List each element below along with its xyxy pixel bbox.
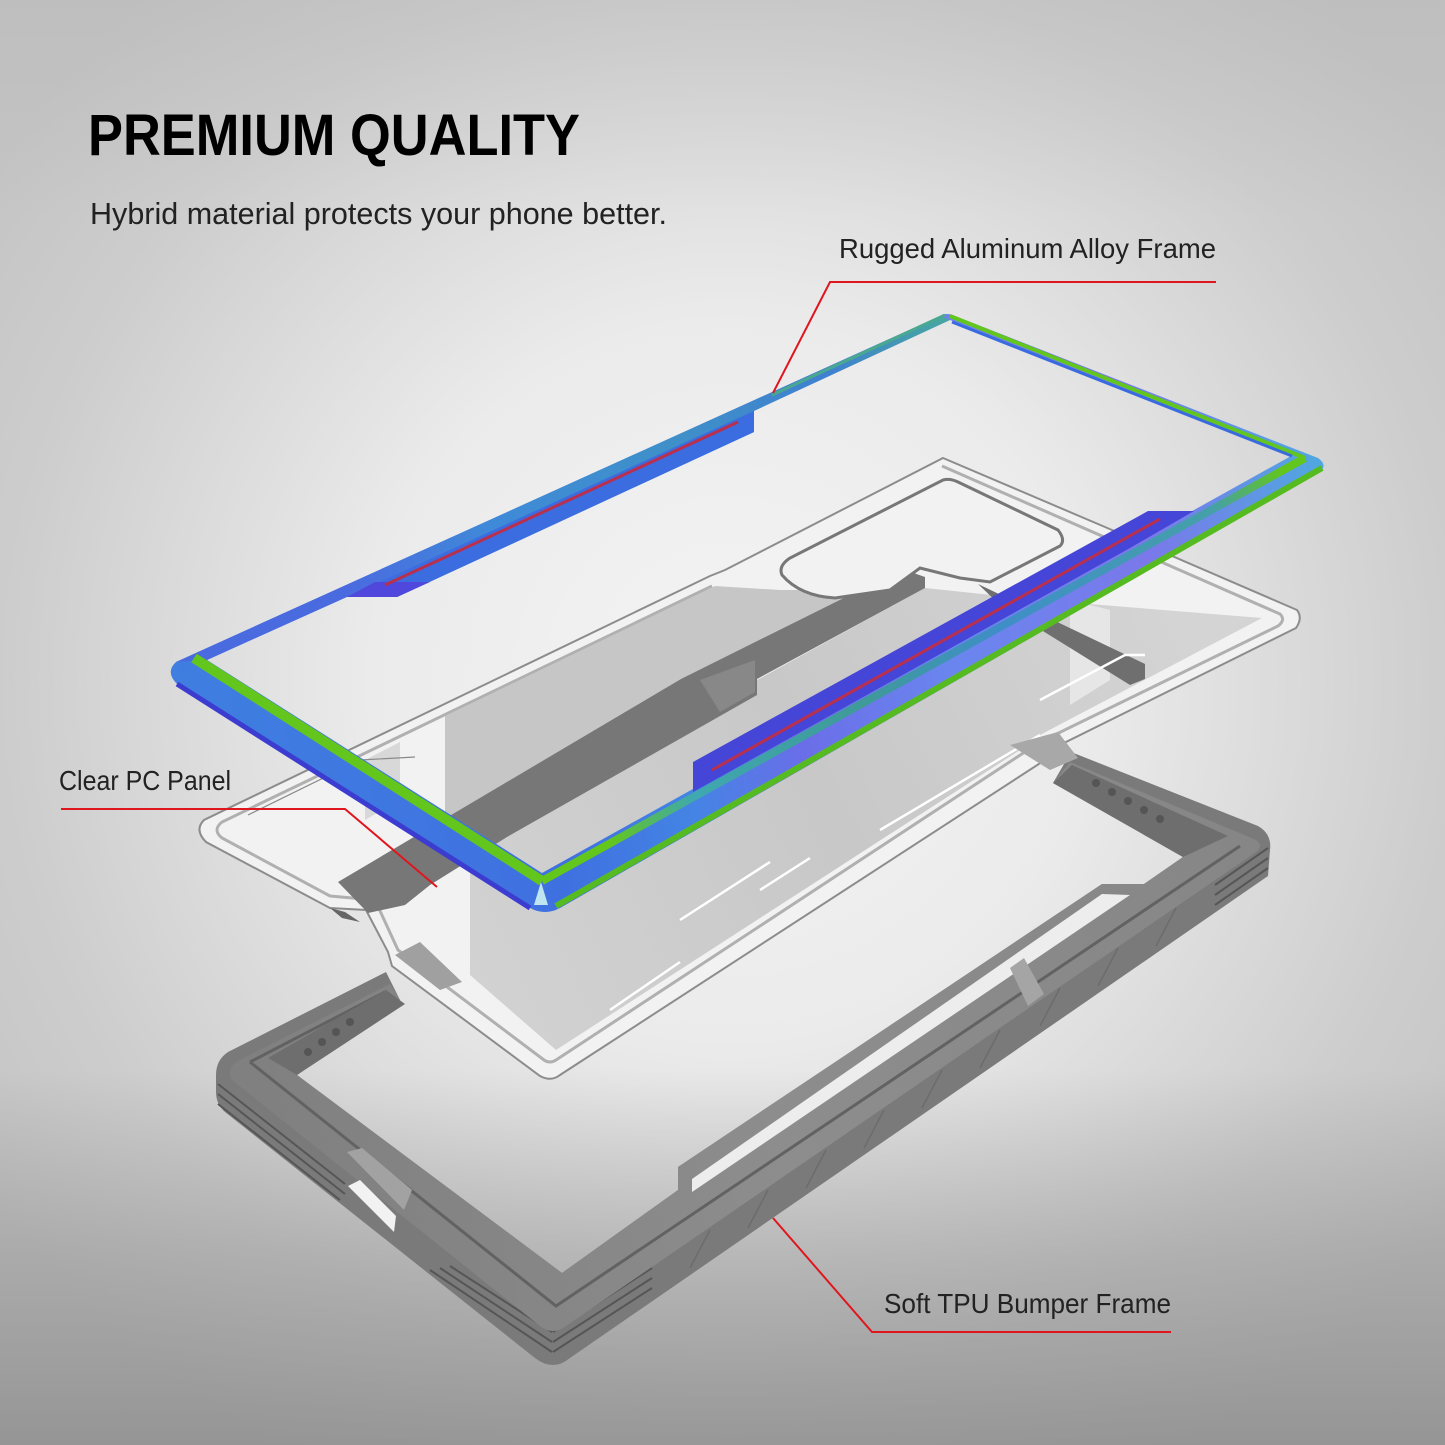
title: PREMIUM QUALITY xyxy=(88,103,580,168)
label: PC panel: Clear PC Panel xyxy=(59,765,231,796)
frame blue body xyxy=(171,314,1324,912)
bumper strip end xyxy=(678,1167,692,1204)
corner chamfer xyxy=(534,882,548,905)
rugged aluminum alloy frame xyxy=(171,314,1324,912)
panel reflections xyxy=(1070,600,1110,705)
camera cutout xyxy=(781,479,1063,598)
soft TPU bumper frame xyxy=(216,752,1270,1365)
side patch: left xyxy=(347,411,754,597)
leader line: aluminum frame xyxy=(773,282,1216,393)
bumper side slot xyxy=(692,894,1130,1192)
label: aluminum frame: Rugged Aluminum Alloy Frame xyxy=(839,233,1216,264)
inner lower-right line xyxy=(542,458,1305,881)
bumper top button xyxy=(1010,958,1044,1006)
bumper side wall xyxy=(216,752,1270,1365)
red accent lines xyxy=(385,422,1160,770)
clear PC panel xyxy=(199,458,1300,1079)
bumper top face xyxy=(230,762,1260,1331)
leader line: bumper xyxy=(773,1218,1171,1332)
subtitle: Hybrid material protects your phone better. xyxy=(90,196,667,231)
green edges xyxy=(194,316,1322,906)
side patch: right xyxy=(693,511,1194,792)
panel inner outline xyxy=(217,466,1283,1062)
bumper recesses xyxy=(268,765,1228,1075)
upper long edge xyxy=(176,316,950,662)
internal dark rail xyxy=(338,569,925,913)
bumper bottom button xyxy=(347,1148,412,1210)
bumper dots xyxy=(304,779,1164,1056)
panel body xyxy=(199,458,1300,1079)
outer purple edge xyxy=(177,684,530,908)
panel highlights xyxy=(610,655,1145,1010)
side buttons on panel xyxy=(1010,732,1078,770)
bumper inner groove xyxy=(250,846,1240,1306)
label: bumper: Soft TPU Bumper Frame xyxy=(884,1288,1171,1319)
panel grey face xyxy=(470,588,1262,1050)
panel edge lines xyxy=(248,757,415,815)
bumper side ribs xyxy=(218,848,1268,1352)
leader line: PC panel xyxy=(61,809,437,887)
upper inner blue edge xyxy=(952,322,1292,456)
